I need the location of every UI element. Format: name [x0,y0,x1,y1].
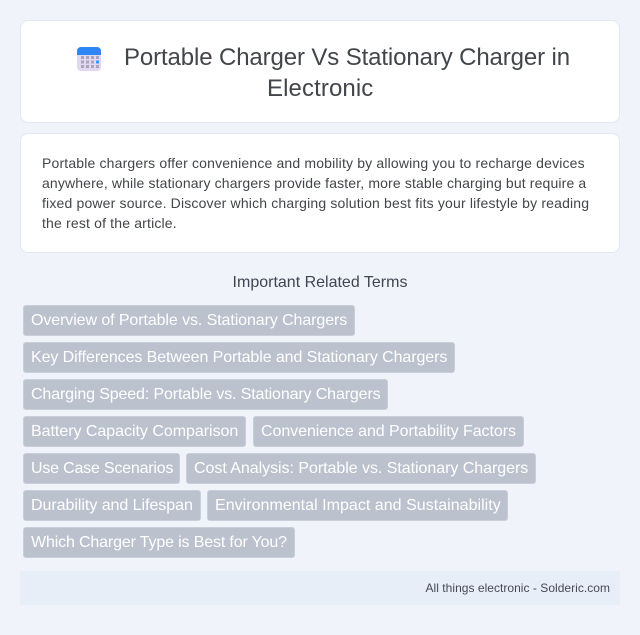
tag [23,527,295,558]
intro paragraph: Portable chargers offer convenience and mobility by allowing you to recharge devices [42,155,585,171]
header panel [20,20,620,123]
icon: calendar [77,47,101,71]
tag: Key Differences Between Portable and Stationary Chargers [31,349,447,366]
title: Portable Charger Vs Stationary Charger in [124,44,570,71]
tag: Overview of Portable vs. Stationary Chargers [31,312,347,329]
tag: Convenience and Portability Factors [261,423,516,440]
tag: Use Case Scenarios [31,460,173,477]
intro paragraph: anywhere, while stationary chargers provide faster, more stable charging but require a [42,175,586,191]
footer bar [20,571,620,605]
tag [23,416,246,447]
intro paragraph: the rest of the article. [42,215,177,231]
tag [23,490,201,521]
tag [253,416,524,447]
intro paragraph [42,155,589,231]
tag: Battery Capacity Comparison [31,423,238,440]
section heading: Important Related Terms [233,274,407,291]
title [124,44,570,102]
tag: Charging Speed: Portable vs. Stationary Chargers [31,386,381,403]
tag: Cost Analysis: Portable vs. Stationary Chargers [194,460,528,477]
intro text panel [20,133,620,253]
tag: Environmental Impact and Sustainability [215,497,501,514]
tag [23,379,388,410]
tag: Which Charger Type is Best for You? [31,534,287,551]
tag [186,453,536,484]
title: Electronic [267,75,373,102]
related terms tags [23,305,536,558]
tag: Durability and Lifespan [31,497,193,514]
intro paragraph: fixed power source. Discover which charging solution best fits your lifestyle by reading [42,195,589,211]
tag [23,342,455,373]
tag [23,305,355,336]
tag [207,490,508,521]
footer text: All things electronic - Solderic.com [426,581,610,595]
tag [23,453,180,484]
